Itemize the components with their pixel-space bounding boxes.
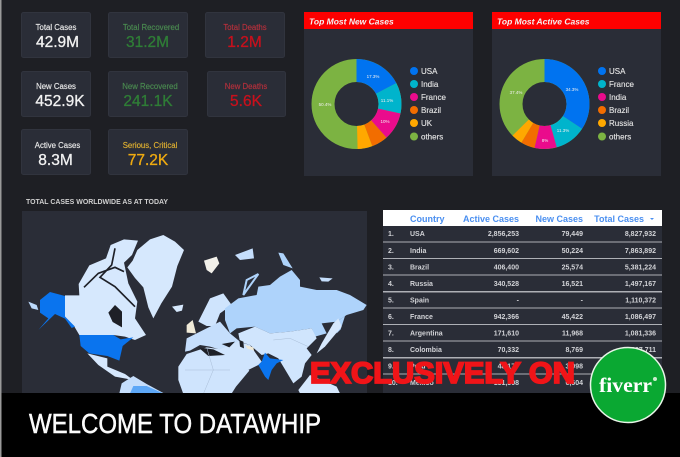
table rows: 16,521 <box>562 281 583 288</box>
donut chart: active cases: 8% <box>542 138 548 143</box>
donut chart: active cases: 37.4% <box>510 90 522 95</box>
card: new recovered: New Recovered <box>122 82 178 91</box>
table rows: 1,497,167 <box>625 281 656 288</box>
USA <box>79 335 133 361</box>
panel: top most new cases <box>304 12 473 176</box>
card: new cases: 452.9K <box>35 93 85 110</box>
country borders <box>203 347 213 394</box>
table rows: - <box>581 298 584 304</box>
legend: active cases: Russia <box>609 119 634 128</box>
table rows: 3,098 <box>565 364 583 370</box>
donut chart: new cases: 11.1% <box>381 98 393 103</box>
card: active cases: Active Cases <box>35 141 80 150</box>
legend: new cases: India <box>421 80 439 89</box>
table header: Total Cases <box>594 214 644 224</box>
table rows: 8,827,932 <box>625 231 656 238</box>
table rows: Brazil <box>410 264 429 272</box>
table rows: 7,863,892 <box>625 248 656 255</box>
table rows: 8,769 <box>565 347 583 354</box>
card: total deaths: 1.2M <box>227 34 262 51</box>
Europe <box>185 322 245 352</box>
table rows: USA <box>410 231 425 238</box>
Caspian <box>239 340 244 348</box>
table rows: 4. <box>388 281 394 288</box>
table rows <box>388 231 656 387</box>
card: total cases <box>22 12 90 58</box>
fiverr badge <box>590 348 666 422</box>
card: active cases: 8.3M <box>38 152 73 169</box>
Greenland <box>127 235 184 318</box>
banner title: WELCOME TO DATAWHIP <box>29 408 321 439</box>
Arctic islands <box>235 248 254 260</box>
table rows: 79,449 <box>562 231 583 238</box>
table rows: 5,381,224 <box>625 264 656 272</box>
card: new deaths <box>208 72 286 116</box>
donut chart: new cases: 17.3% <box>367 74 379 79</box>
table rows: 1,081,336 <box>625 330 656 338</box>
table rows: - <box>517 298 520 304</box>
data table <box>383 210 662 393</box>
table rows: 669,602 <box>494 248 519 255</box>
India <box>258 353 283 380</box>
legend: active cases: Brazil <box>609 106 629 115</box>
bottom banner <box>2 393 680 457</box>
Hudson Bay <box>108 305 122 327</box>
Black Sea <box>222 342 235 347</box>
card: new recovered <box>108 72 188 116</box>
table header <box>383 210 662 226</box>
KPI cards <box>22 12 286 174</box>
UK <box>187 320 196 333</box>
Eastern Siberian islands <box>319 277 333 282</box>
Africa <box>178 347 249 394</box>
table rows: 11,968 <box>562 330 583 338</box>
legend: new cases: France <box>421 93 446 102</box>
legend: active cases <box>598 67 634 142</box>
legend: new cases <box>410 67 446 142</box>
Aleutian tip <box>28 302 38 310</box>
table rows: 171,610 <box>494 330 519 338</box>
card: serious, critical <box>108 130 188 174</box>
card: new cases: New Cases <box>36 82 76 91</box>
Japan <box>317 318 342 353</box>
legend: new cases: USA <box>421 67 438 76</box>
table rows: Peru <box>410 364 426 370</box>
Alaska <box>38 292 75 330</box>
table rows: 25,574 <box>562 264 583 272</box>
table rows: India <box>410 248 426 255</box>
legend: active cases: France <box>609 80 634 89</box>
card: serious, critical: Serious, Critical <box>123 141 178 150</box>
table rows: Russia <box>410 281 433 288</box>
table rows: 45,422 <box>562 314 583 321</box>
table rows: 2. <box>388 248 394 255</box>
archipelago channels north <box>100 248 135 307</box>
legend: active cases: USA <box>609 67 626 76</box>
Svalbard <box>204 257 219 273</box>
fiverr badge: fiverr <box>599 373 652 397</box>
table rows: 6. <box>388 314 394 321</box>
legend: new cases: others <box>421 132 443 142</box>
Brazil and neighbours <box>130 386 163 393</box>
Canadian archipelago and mainland <box>65 239 146 340</box>
card: total deaths <box>206 12 284 58</box>
table rows: 9. <box>388 364 394 370</box>
table rows: 340,528 <box>494 281 519 288</box>
Middle East <box>217 342 262 375</box>
table rows: France <box>410 314 433 321</box>
card: total recovered <box>108 12 188 58</box>
Russia <box>225 270 367 337</box>
Mediterranean <box>198 347 225 356</box>
card: total cases: 42.9M <box>36 34 79 51</box>
panel header <box>304 12 473 29</box>
panel header <box>492 12 661 29</box>
donut chart: active cases <box>510 70 578 143</box>
card: new deaths: New Deaths <box>225 82 267 91</box>
Iceland <box>172 305 183 312</box>
Central and East Asia <box>238 327 317 383</box>
card: total deaths: Total Deaths <box>223 23 267 32</box>
table rows: 1,007,711 <box>625 347 656 354</box>
Pakistan and Afghanistan highlight <box>245 345 254 351</box>
world map panel <box>22 211 367 401</box>
card: serious, critical: 77.2K <box>128 152 169 169</box>
map heading: TOTAL CASES WORLDWIDE AS AT TODAY <box>26 197 168 206</box>
donut chart: new cases: 50.4% <box>319 102 331 107</box>
table rows: 1,086,497 <box>625 314 656 321</box>
South America <box>119 376 164 393</box>
legend: new cases: Brazil <box>421 106 441 115</box>
table rows: Spain <box>410 298 429 304</box>
table rows: 10. <box>388 380 398 387</box>
panel header: Top Most New Cases <box>309 16 394 26</box>
table rows: Mexico <box>410 380 434 387</box>
Novaya Zemlya <box>278 253 293 268</box>
table rows: 8. <box>388 347 394 354</box>
table rows: Colombia <box>410 347 442 354</box>
table header: New Cases <box>535 214 583 224</box>
Kamchatka <box>337 316 345 333</box>
table rows: 2,856,253 <box>488 231 519 238</box>
table rows: 48,177 <box>498 364 519 370</box>
row separators <box>383 242 662 374</box>
table rows: 3. <box>388 264 394 272</box>
donut chart: new cases: 10% <box>380 119 390 124</box>
Eurasia group in zoom coordinates <box>185 248 367 393</box>
Scandinavia <box>198 293 232 326</box>
table header: Country <box>410 214 444 224</box>
card: new cases <box>22 72 90 116</box>
Novaya Zemlya west <box>243 274 258 295</box>
table rows: Argentina <box>410 330 443 338</box>
table header: Active Cases <box>463 214 519 224</box>
table rows: 1. <box>388 231 394 238</box>
archipelago channels <box>84 267 124 287</box>
table rows: 902,503 <box>631 364 656 370</box>
exclusively on overlay text: EXCLUSIVELY ON <box>310 357 575 390</box>
legend: active cases: others <box>609 132 631 142</box>
card: total cases: Total Cases <box>36 23 76 32</box>
card: new recovered: 241.1K <box>123 93 173 110</box>
card: new deaths: 5.6K <box>230 93 263 110</box>
card: active cases <box>22 130 90 174</box>
card: total recovered: Total Recovered <box>123 23 179 32</box>
table rows: 406,400 <box>494 264 519 272</box>
table rows: 895,326 <box>631 380 656 387</box>
table rows: 50,224 <box>562 248 583 255</box>
table rows: 7. <box>388 330 394 338</box>
Mexico and Central America <box>87 353 133 380</box>
table rows: 70,332 <box>498 347 519 354</box>
legend: new cases: UK <box>421 119 433 128</box>
donut chart: new cases <box>319 70 393 138</box>
table rows: 131,308 <box>494 380 519 387</box>
table rows: 942,366 <box>494 314 519 321</box>
Southeast Asian islands <box>298 375 340 393</box>
panel header: Top Most Active Cases <box>497 16 590 26</box>
panel: top most active cases <box>492 12 661 176</box>
donut chart: active cases: 34.3% <box>566 87 578 92</box>
card: total recovered: 31.2M <box>126 34 169 51</box>
legend: active cases: India <box>609 93 627 102</box>
table rows: 5. <box>388 298 394 304</box>
donut chart: active cases: 11.3% <box>557 128 569 133</box>
table rows: 6,604 <box>565 380 583 387</box>
table rows: 1,110,372 <box>625 298 656 304</box>
